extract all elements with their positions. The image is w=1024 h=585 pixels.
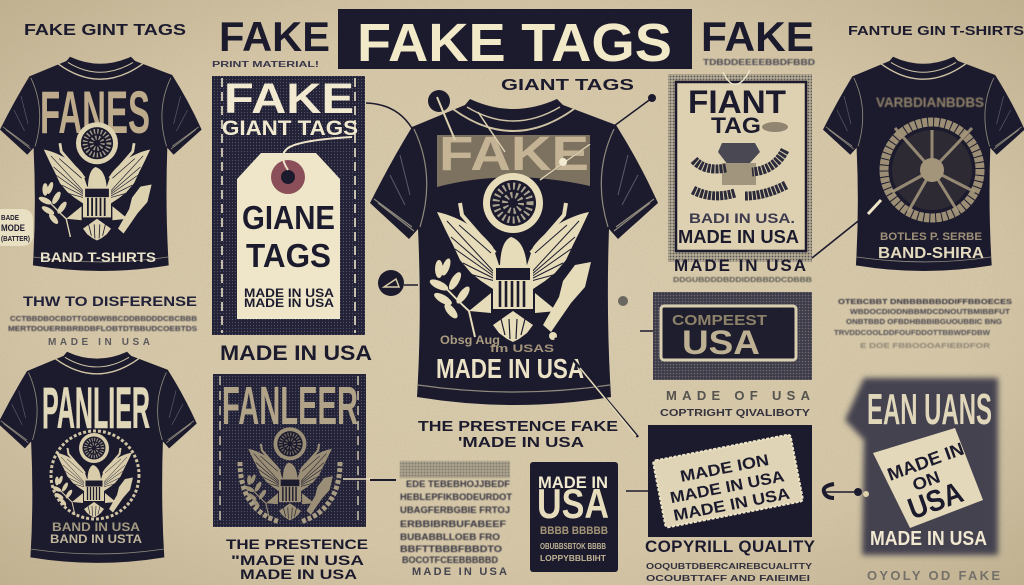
label: made in usa box — [530, 462, 618, 572]
caption: made in usa right: DDGUBDDDBDDIDDBBDDCDBBB — [673, 277, 812, 284]
callout: made badge: BADE — [1, 215, 19, 222]
t-shirt: top right: BOTLES P. SERBE — [880, 231, 982, 243]
text block: distressed small print: MADE IN USA — [412, 566, 507, 578]
panel: ean uans band print: MADE IN USA — [870, 528, 987, 550]
t-shirt: bottom left: BAND IN USA — [52, 520, 140, 534]
text block: differences small print: TRVDDCOOLDDFOUFDDOTTBBWDFDBW — [834, 330, 990, 337]
panel: fanleer print — [213, 374, 366, 527]
text block: distressed small print: BBFTTBBBFBBDTO — [400, 544, 502, 554]
heading: giant tags: GIANT TAGS — [501, 77, 634, 94]
arrow: clip connector — [824, 484, 869, 498]
callout: made badge — [0, 209, 33, 246]
caption: made of usa: MADE OF USA — [666, 388, 811, 403]
emblem: circular print — [884, 122, 980, 218]
marker: smudge pointer — [618, 296, 653, 331]
text block: how to differentiate: MERTDOUERBBRBDBFLOBTDTBBUDCOEBTDS — [8, 326, 197, 333]
t-shirt: center: Obsg Aug — [440, 333, 500, 347]
patch: copyright usa: COMPEEST — [672, 312, 767, 329]
text block: distressed small print: HEBLEPFIKBODEURDOT — [400, 492, 513, 502]
text block: differences small print: WBDOCDIODNBBMDCDNOUTBMIBBFUT — [850, 309, 1011, 316]
t-shirt: center: FAKE — [439, 128, 589, 181]
text block: the presence: MADE IN USA — [240, 566, 357, 582]
arrow: made in usa to band shirt — [812, 200, 881, 258]
heading: fake right: FAKE — [701, 13, 814, 60]
t-shirt: top left — [0, 57, 202, 271]
text block: how to differentiate: THW TO DISFERENSE — [23, 293, 197, 309]
text block: copyrill quality: COPYRILL QUALITY — [645, 537, 816, 556]
caption: small print under right fake: TDBDDEEEEBBDFBBD — [703, 58, 815, 67]
tag body: MADE IN USA — [244, 286, 334, 300]
panel: ean uans band print: ON — [910, 467, 943, 495]
text block: distressed small print — [400, 461, 513, 578]
text block: distressed small print: UBAGFERBGBIE FRTOJ — [400, 505, 510, 515]
callout: made badge: MODE — [1, 223, 25, 233]
text block: distressed small print: ERBBIBRBUFABEEF — [400, 519, 507, 529]
panel: ean uans band print: MADE IN — [885, 439, 967, 485]
text block: how to differentiate — [8, 293, 197, 348]
callout: made badge: (BATTER) — [1, 236, 30, 243]
title banner: FAKE TAGS — [357, 13, 672, 73]
t-shirt: bottom left — [0, 352, 197, 563]
caption: the presence fake — [418, 418, 618, 451]
arrow: tag to shirt — [366, 103, 413, 130]
caption: made in usa right: MADE IN USA — [674, 256, 806, 275]
label: made in usa box: USA — [537, 480, 609, 527]
t-shirt: top left: FANES — [40, 79, 150, 146]
caption: the presence fake: 'MADE IN USA — [458, 434, 584, 451]
arrow: giant tag to seal — [538, 94, 656, 182]
caption: made in usa: MADE IN USA — [220, 342, 372, 365]
arrow: circle pointer to fake print — [428, 90, 505, 152]
text block: differences small print: OTEBCBBT DNBBBBBBDDIFFBBOECES — [838, 297, 1012, 306]
text block: differences small print — [834, 297, 1012, 350]
t-shirt: center — [370, 99, 658, 405]
t-shirt: top left: BAND T-SHIRTS — [40, 249, 156, 265]
panel: giant hang tag: FAKE — [224, 75, 354, 123]
heading: fake left: FAKE — [219, 13, 330, 60]
label: made in usa box: MADE IN — [538, 473, 608, 492]
panel: stitched made in usa label: MADE IN USA — [669, 468, 786, 507]
text block: distressed small print: BUBABBLLOEB FRO — [400, 532, 500, 542]
label: made in usa box: LOPPYBBLBIHT — [540, 554, 606, 563]
panel: right fiant tag: TAG — [711, 113, 761, 138]
tag body: TAGS — [246, 237, 331, 274]
heading: fantue t-shirts: FANTUE GIN T-SHIRTS — [848, 23, 1024, 38]
heading: fake giant tags: FAKE GINT TAGS — [24, 22, 186, 39]
text block: differences small print: ONBTBBD OFBDHBBBIBGUOUBBIC BNG — [846, 319, 1003, 326]
panel: ean uans band print: USA — [904, 476, 968, 526]
text block: copyrill quality: OOQUBTDBERCAIREBCUALITTY — [646, 561, 812, 571]
tag body: GIANE — [242, 199, 335, 236]
caption: material: PRINT MATERIAL! — [212, 60, 319, 69]
t-shirt: center: fm USAS — [490, 343, 554, 355]
text block: the presence — [226, 536, 368, 582]
text block: copyrill quality: OCOUBTTAFF AND FAIEIMEI — [646, 573, 810, 583]
panel: right fiant tag: MADE IN USA — [678, 227, 799, 247]
patch: copyright usa — [653, 292, 812, 380]
t-shirt: top right: BAND-SHIRA — [878, 245, 984, 262]
t-shirt: center: MADE IN USA — [436, 353, 584, 384]
text block: the presence: THE PRESTENCE — [226, 536, 368, 552]
tag body — [237, 137, 352, 319]
arrow: made in usa to label — [549, 332, 638, 437]
t-shirt: top right — [823, 57, 1024, 271]
text block: differences small print: E DOE FBBOOOAFIEBDFOR — [860, 343, 990, 350]
caption: oyoly od fake: OYOLY OD FAKE — [867, 568, 1000, 583]
arrow: panel to small print — [343, 479, 396, 480]
panel: right fiant tag — [668, 70, 812, 262]
panel: stitched made in usa label: MADE ION — [679, 452, 770, 486]
panel: giant hang tag: GIANT TAGS — [222, 117, 358, 140]
t-shirt: top right: VARBDIANBDBS — [876, 94, 984, 110]
caption: made of usa — [660, 388, 811, 419]
caption: made in usa right — [673, 256, 812, 284]
patch: copyright usa: USA — [682, 324, 760, 362]
label: made in usa box: BBBB BBBBB — [540, 525, 608, 537]
arrow: left circle pointer — [378, 270, 418, 296]
panel: stitched made in usa label — [648, 425, 812, 537]
caption: made of usa: COPTRIGHT QIVALIBOTY — [660, 408, 810, 419]
wreath emblem — [693, 143, 786, 196]
panel: right fiant tag: FIANT — [688, 84, 786, 120]
text block: the presence: "MADE IN USA — [231, 552, 364, 568]
arrow: box to label — [626, 490, 648, 492]
text block: how to differentiate: CCTBBDBOCBDTTGDBWBBCDDBBDDDCBCBBB — [10, 316, 197, 323]
t-shirt: bottom left: BAND IN USTA — [50, 532, 142, 546]
text block: how to differentiate: MADE IN USA — [48, 337, 150, 348]
panel: giant hang tag — [212, 75, 365, 335]
t-shirt: bottom left: PANLIER — [42, 376, 150, 441]
text block: distressed small print: BOCOTFCEEBBBBBD — [402, 555, 499, 565]
text block: copyrill quality — [645, 537, 816, 583]
label: made in usa box: OBUBBSBTOK BBBB — [540, 542, 606, 551]
panel: stitched made in usa label: MADE IN USA — [672, 486, 792, 525]
caption: the presence fake: THE PRESTENCE FAKE — [418, 418, 618, 435]
tag body: MADE IN USA — [244, 296, 334, 310]
panel: right fiant tag: BADI IN USA. — [689, 210, 795, 226]
panel: ean uans band print — [845, 378, 998, 555]
text block: distressed small print: EDE TEBEBHOJJBEDF — [406, 479, 511, 489]
panel: fanleer print: FANLEER — [222, 376, 358, 436]
